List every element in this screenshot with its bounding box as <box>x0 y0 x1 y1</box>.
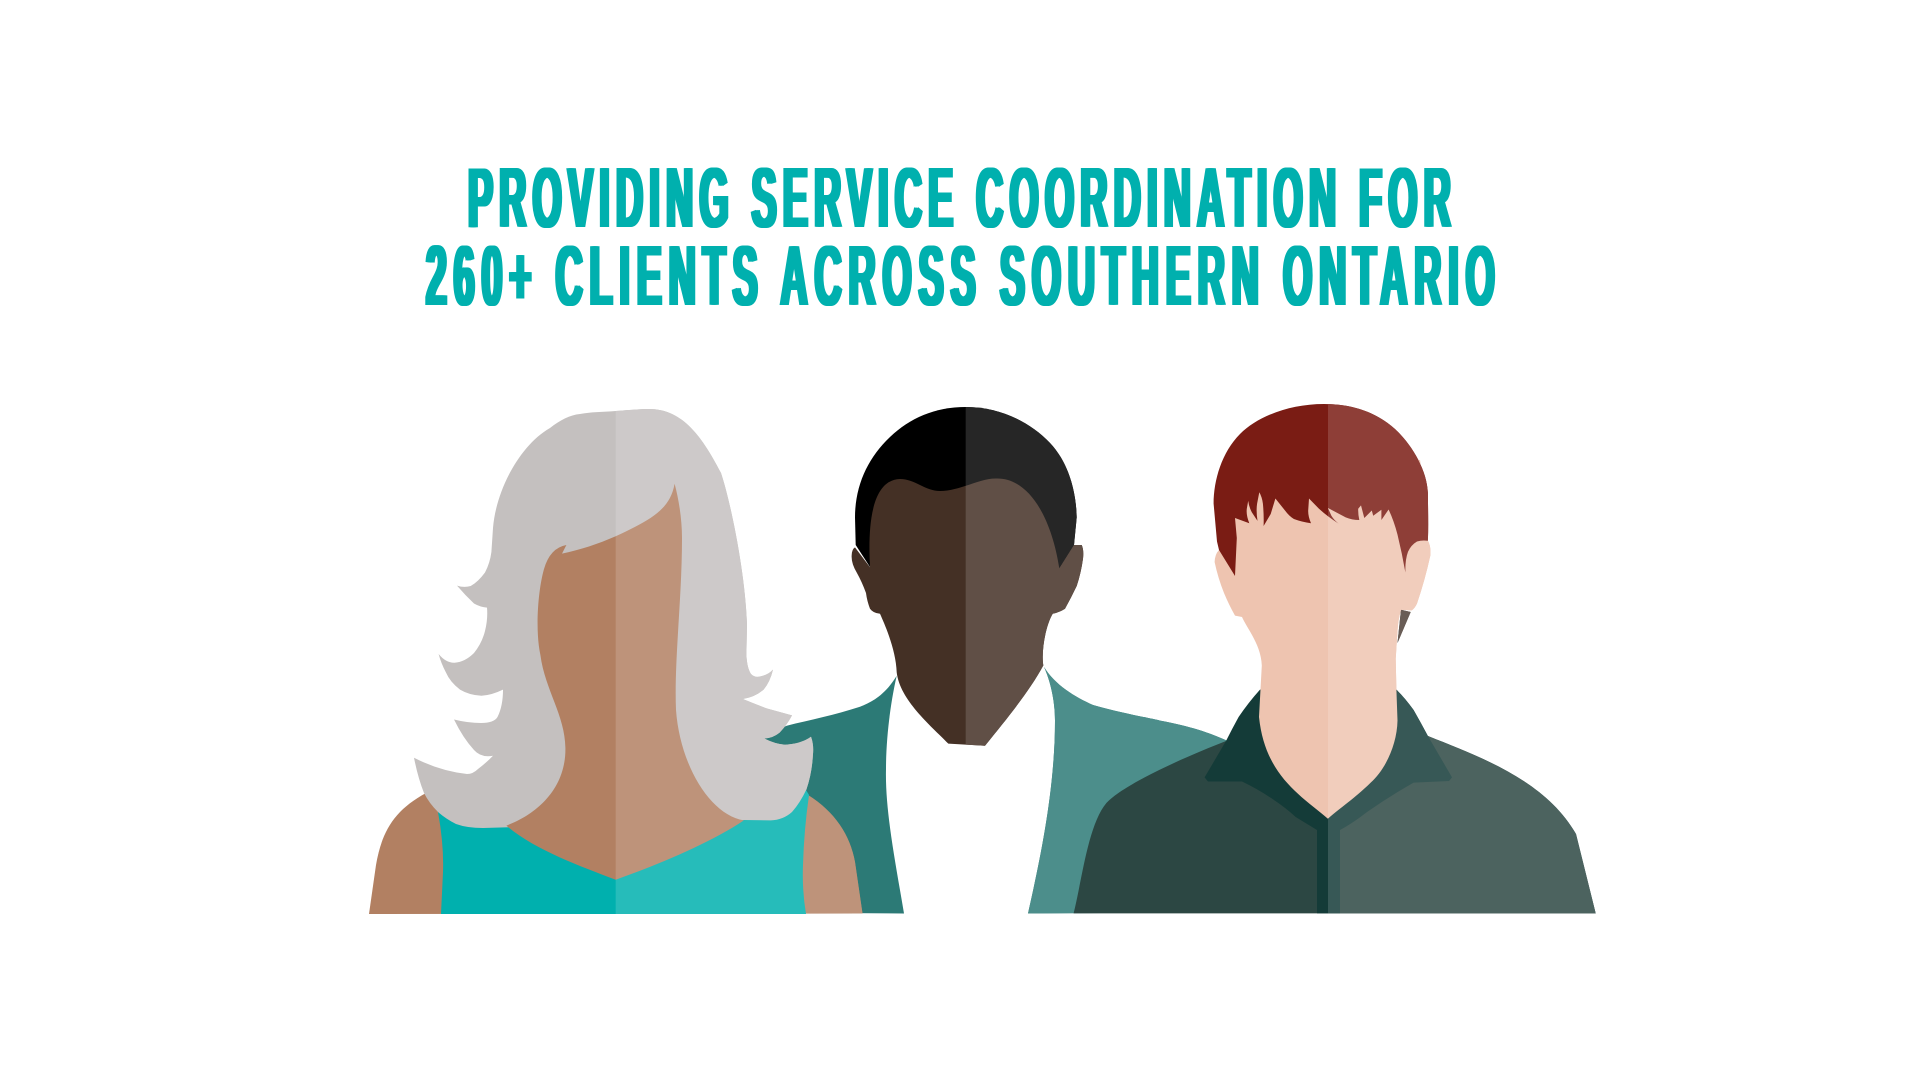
woman face, neck and chest <box>506 484 744 880</box>
title: 260+ CLIENTS ACROSS SOUTHERN ONTARIO <box>424 229 1500 324</box>
collar and placket <box>1205 680 1452 913</box>
person: man on right <box>1074 404 1596 913</box>
woman hair <box>414 409 813 828</box>
woman top <box>438 780 809 914</box>
woman arms <box>369 793 862 914</box>
person: woman on left <box>369 409 862 914</box>
face and neck <box>1215 460 1430 819</box>
title: PROVIDING SERVICE COORDINATION FOR <box>466 151 1455 246</box>
man jacket <box>760 667 1240 914</box>
person: man in centre <box>760 407 1240 914</box>
man hair <box>855 407 1077 568</box>
title <box>424 151 1500 324</box>
brown shadow behind neck <box>1398 610 1411 643</box>
hair with fringe <box>1214 404 1428 576</box>
man face and neck <box>852 478 1083 746</box>
shirt <box>1074 736 1596 913</box>
